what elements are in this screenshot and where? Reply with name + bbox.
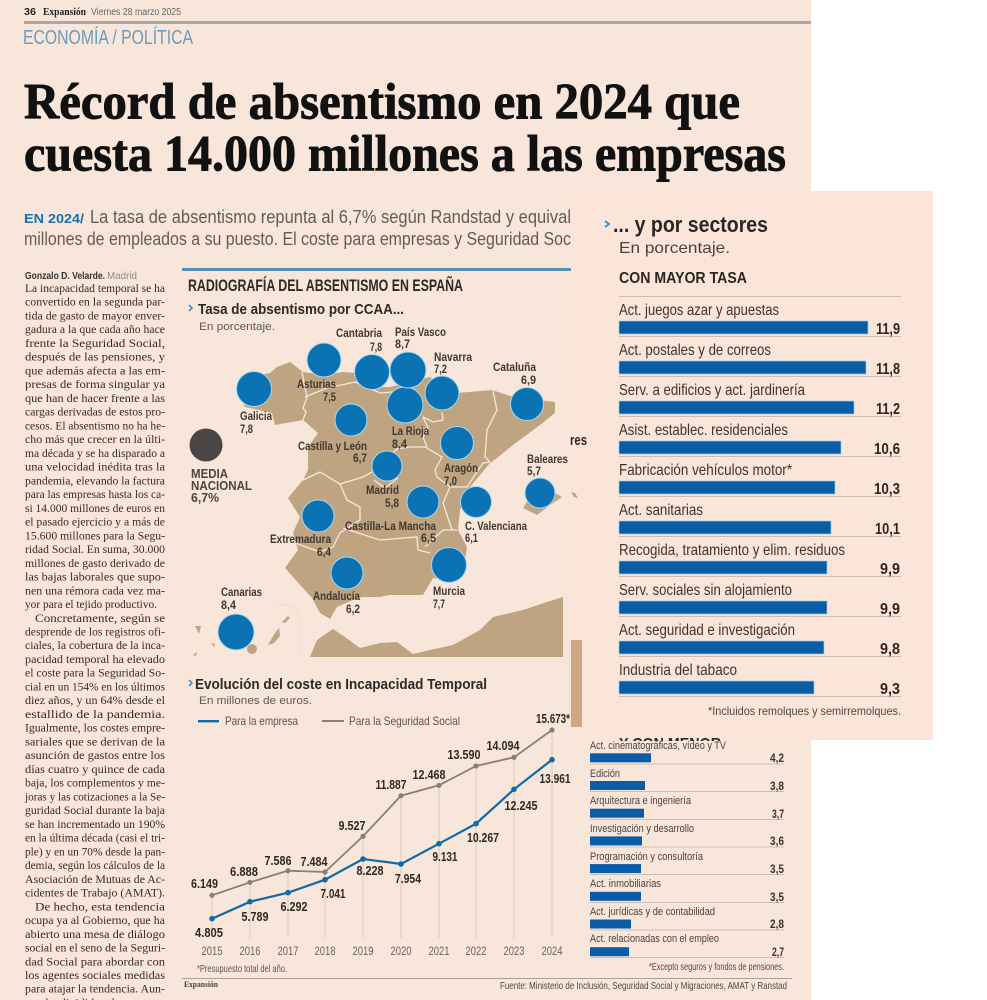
values: Seguridad Social: 6.149: [191, 876, 218, 891]
chart heading: Evolución del coste en Incapacidad Temporal: [195, 676, 487, 693]
map labels: La Rioja: [392, 424, 429, 438]
article body text: millones de gasto derivado de: [25, 556, 165, 570]
article body text: las bajas laborales que supo-: [25, 570, 165, 584]
article body text: frente la Seguridad Social,: [25, 336, 165, 350]
year axis: 2018: [314, 944, 336, 958]
bar chart: lowest rates: 2,8: [770, 917, 784, 931]
bar chart: lowest rates: Act. jurídicas y de contabilidad: [590, 906, 715, 918]
article body text: días cuatro y quince de cada: [25, 762, 166, 776]
lower chart backing: [572, 741, 811, 977]
page header: Viernes 28 marzo 2025: [91, 7, 181, 18]
values: Seguridad Social: 12.468: [412, 767, 446, 782]
map labels: 7,8: [240, 422, 253, 436]
article body text: Concretamente, según se: [35, 611, 165, 625]
title: cuesta 14.000 millones a las empresas: [24, 126, 786, 182]
infographic heading: RADIOGRAFÍA DEL ABSENTISMO EN ESPAÑA: [188, 275, 463, 295]
map heading: En porcentaje.: [199, 321, 275, 333]
article body text: diez años, y un 64% desde el: [25, 693, 166, 707]
map fragment beside panel: res: [570, 432, 587, 449]
map heading: Tasa de absentismo por CCAA...: [198, 301, 404, 318]
article body text: joras y las cotizaciones a la Se-: [24, 789, 165, 803]
article body text: ridad Social. En suma, 30.000: [25, 542, 165, 556]
values: Seguridad Social: 15.673*: [536, 711, 571, 726]
bar chart: highest rates: Act. juegos azar y apuestas: [619, 302, 779, 319]
map labels: 7,0: [444, 474, 457, 488]
line chart: cost evolution: [191, 711, 571, 958]
map labels: Baleares: [527, 452, 568, 466]
page header: [24, 7, 811, 24]
bar chart: highest rates: 9,3: [880, 681, 900, 698]
values: Seguridad Social: [191, 711, 571, 891]
values: empresa: 4.805: [195, 925, 223, 940]
bar chart: highest rates: Recogida, tratamiento y elim. residuos: [619, 542, 845, 559]
values: Seguridad Social: 11.887: [376, 777, 406, 792]
bar chart: lowest rates: 3,8: [770, 779, 784, 793]
year axis: 2024: [542, 944, 563, 958]
year axis: [202, 944, 563, 958]
article body text: que han de hacer frente a las: [25, 391, 165, 405]
clipped heading behind lower chart: Y CON MENOR: [619, 735, 721, 752]
article body text: cargas derivadas de estos pro-: [25, 405, 165, 419]
map labels: Extremadura: [270, 532, 331, 546]
sectors heading: CON MAYOR TASA: [619, 270, 747, 287]
chart legend: Para la empresa: [225, 714, 298, 728]
Canarias inset frame: [275, 605, 300, 652]
article body text: para las empresas hasta los ca-: [25, 487, 165, 501]
map labels: Navarra: [434, 350, 472, 364]
bar chart: highest rates: 9,8: [880, 641, 900, 658]
values: empresa: 9.131: [432, 849, 458, 864]
article body text: social en el seno de la Seguri-: [25, 940, 165, 954]
map labels: Castilla-La Mancha: [345, 519, 436, 533]
article body text: en la última década (casi el tri-: [25, 831, 165, 845]
values: empresa: 12.245: [504, 798, 538, 813]
map labels: 8,4: [392, 437, 407, 451]
subtitle: millones de empleados a su puesto. El coste para empresas y Seguridad Soc: [24, 228, 571, 249]
year axis: 2016: [240, 944, 261, 958]
chart legend: Para la Seguridad Social: [349, 714, 460, 728]
article body text: los agentes sociales medidas: [25, 968, 165, 982]
article body text: que además afecta a las em-: [25, 363, 165, 377]
subtitle: [24, 206, 571, 249]
map labels: Andalucía: [313, 589, 360, 603]
byline: Gonzalo D. Velarde.: [25, 270, 105, 282]
chart footnote: *Presupuesto total del año.: [197, 964, 287, 975]
subtitle: EN 2024/: [24, 211, 84, 226]
national average marker: MEDIA: [191, 466, 229, 481]
year axis: 2015: [202, 944, 223, 958]
mainland silhouette: [238, 362, 555, 619]
sectors heading: ... y por sectores: [613, 212, 768, 237]
bar chart: highest rates: Asist. establec. residenciales: [619, 422, 788, 439]
page header: 36: [24, 7, 36, 18]
bar chart: highest rates: [619, 302, 901, 698]
article body text: De hecho, esta tendencia: [35, 899, 166, 913]
bar chart: highest rates: 9,9: [880, 601, 900, 618]
map labels: 6,4: [317, 545, 331, 559]
bar chart: lowest rates: Investigación y desarrollo: [590, 823, 694, 835]
bar chart: highest rates: Serv. sociales sin alojamiento: [619, 582, 792, 599]
article body text: desprende de los registros ofi-: [25, 624, 165, 638]
national average marker: NACIONAL: [191, 478, 252, 493]
bar chart: lowest rates: 3,7: [772, 807, 784, 821]
article body text: La incapacidad temporal se ha: [25, 281, 166, 295]
lower chart footnote: *Excepto seguros y fondos de pensiones.: [649, 962, 784, 973]
Baleares: [523, 490, 562, 515]
map labels: 7,5: [323, 390, 336, 404]
values: Seguridad Social: 7.484: [300, 854, 328, 869]
article body text: guridad Social durante la baja: [25, 803, 166, 817]
article body text: tida de gasto de mayor enver-: [25, 308, 165, 322]
bar chart: lowest rates: Programación y consultoría: [590, 851, 704, 863]
map labels: Castilla y León: [298, 439, 367, 453]
article body text: el coste para la Seguridad So-: [25, 666, 165, 680]
series: empresa: [209, 757, 555, 922]
regional borders: [295, 372, 497, 553]
map labels: C. Valenciana: [465, 519, 527, 533]
bar chart: highest rates: Industria del tabaco: [619, 662, 737, 679]
article body text: cidentes de Trabajo (AMAT).: [25, 886, 165, 900]
article body text: ocupa ya al Gobierno, que ha: [25, 913, 166, 927]
map labels: 7,8: [370, 340, 382, 354]
bar chart: highest rates: 9,9: [880, 561, 900, 578]
map labels: Canarias: [221, 585, 262, 599]
map labels: 5,7: [527, 464, 541, 478]
bar chart: highest rates: 10,3: [874, 481, 900, 498]
article body text: una velocidad inédita tras la: [25, 460, 166, 474]
values: Seguridad Social: 6.888: [230, 864, 258, 879]
byline: Madrid: [107, 270, 137, 282]
bar chart: highest rates: 10,1: [875, 521, 900, 538]
values: Seguridad Social: 7.586: [264, 853, 292, 868]
values: empresa: 7.041: [320, 886, 346, 901]
bar chart: lowest rates: Act. inmobiliarias: [590, 878, 661, 890]
values: Seguridad Social: 13.590: [448, 747, 480, 762]
bar chart: lowest rates: Edición: [590, 768, 620, 780]
title: Récord de absentismo en 2024 que: [24, 74, 740, 130]
article body text: ma década y se ha disparado a: [25, 446, 166, 460]
article body text: pacidad temporal ha elevado: [25, 652, 165, 666]
article body text: dad Social para abordar con: [25, 954, 165, 968]
title: [24, 74, 786, 182]
map labels: Murcia: [433, 584, 465, 598]
map bubbles: [218, 343, 555, 650]
article body text: para atajar la tendencia. Aun-: [25, 982, 165, 996]
subtitle: La tasa de absentismo repunta al 6,7% según Randstad y equival: [90, 206, 571, 227]
map labels: 8,4: [221, 598, 236, 612]
bar chart: highest rates: 11,9: [876, 321, 900, 338]
page header: Expansión: [43, 7, 86, 18]
values: Seguridad Social: 14.094: [486, 738, 520, 753]
map labels: Asturias: [297, 377, 336, 391]
article body text: Igualmente, los costes empre-: [25, 721, 165, 735]
map labels: [221, 325, 568, 616]
year axis: 2022: [466, 944, 487, 958]
values: empresa: 6.292: [280, 899, 308, 914]
article body text: nen una rémora cada vez ma-: [25, 583, 165, 597]
bar chart: lowest rates: Arquitectura e ingeniería: [590, 795, 692, 807]
values: empresa: 10.267: [467, 830, 499, 845]
values: empresa: 8.228: [356, 863, 384, 878]
map labels: Galicia: [240, 409, 272, 423]
bar chart: lowest rates: 3,5: [770, 862, 784, 876]
bar chart: lowest rates: Act. cinematográficas, vídeo y TV: [590, 740, 727, 752]
north Africa: [310, 597, 563, 657]
chart legend: [198, 714, 460, 728]
article body text: cho más que crecer en la últi-: [25, 432, 165, 446]
year axis: 2020: [390, 944, 412, 958]
bar chart: highest rates: 11,8: [876, 361, 900, 378]
year axis: 2019: [352, 944, 374, 958]
bar chart: highest rates: 10,6: [874, 441, 900, 458]
section label: ECONOMÍA / POLÍTICA: [23, 26, 194, 49]
bar chart: highest rates: 11,2: [876, 401, 900, 418]
map labels: 5,8: [385, 496, 399, 510]
article body text: convertido en la segunda par-: [25, 295, 165, 309]
article body text: se han incrementado un 190%: [25, 817, 165, 831]
bar chart: highest rates: Serv. a edificios y act. jardinería: [619, 382, 805, 399]
map labels: País Vasco: [395, 325, 446, 339]
footer: Fuente: Ministerio de Inclusión, Seguridad Social y Migraciones, AMAT y Ranstad: [500, 980, 787, 992]
article body text: demia, según los cálculos de la: [25, 858, 166, 872]
year axis: 2021: [428, 944, 450, 958]
map labels: Aragón: [444, 461, 478, 475]
bar chart: highest rates: Act. postales y de correos: [619, 342, 771, 359]
map labels: 6,2: [346, 602, 360, 616]
map labels: Cantabria: [336, 326, 382, 340]
bar chart: lowest rates: Act. relacionadas con el empleo: [590, 933, 719, 945]
Canarias: [193, 616, 290, 656]
national average marker: 6,7%: [191, 490, 219, 505]
map labels: 6,1: [465, 531, 478, 545]
article body text: si 14.000 millones de euros en: [25, 501, 165, 515]
map labels: Cataluña: [493, 360, 536, 374]
bar chart: lowest rates: 3,5: [770, 890, 784, 904]
map fragment beside panel: [570, 432, 587, 727]
series: Seguridad Social: [209, 727, 555, 898]
bar chart: highest rates: Act. seguridad e investigación: [619, 622, 795, 639]
infographic top rule: [182, 268, 571, 271]
values: empresa: 7.954: [395, 871, 422, 886]
sectors heading: En porcentaje.: [619, 240, 730, 257]
bar chart: lowest rates: 2,7: [772, 945, 784, 959]
values: Seguridad Social: 9.527: [338, 818, 366, 833]
bar chart: lowest rates: 4,2: [770, 751, 784, 765]
bar chart: highest rates: Fabricación vehículos motor*: [619, 462, 792, 479]
values: empresa: 5.789: [242, 909, 268, 924]
map heading: [189, 301, 404, 333]
article body text: asunción de gastos entre los: [25, 748, 165, 762]
article body text: el pasado ejercicio y a más de: [25, 515, 165, 529]
article body text: Asociación de Mutuas de Ac-: [25, 872, 165, 886]
values: empresa: 13.961: [540, 771, 570, 786]
bar chart: highest rates: Act. sanitarias: [619, 502, 703, 519]
article body text: presas de forma singular ya: [25, 377, 166, 391]
map labels: 7,7: [433, 597, 445, 611]
article body text: abierto una mesa de diálogo: [25, 927, 165, 941]
bar chart: lowest rates: 3,6: [770, 834, 784, 848]
year guide lines: [212, 730, 552, 938]
map labels: 7,2: [434, 362, 447, 376]
article body text: cial en un 154% en los últimos: [25, 680, 165, 694]
footer: Expansión: [184, 980, 219, 989]
chart heading: En millones de euros.: [199, 695, 312, 707]
footer: [182, 978, 792, 992]
article body text: [24, 281, 166, 1000]
map labels: 6,5: [421, 531, 436, 545]
map labels: 8,7: [395, 337, 410, 351]
article body text: gadura a la que cada año hace: [25, 322, 165, 336]
sectors heading: [605, 212, 901, 297]
year axis: 2023: [504, 944, 525, 958]
article body text: después de las pensiones, y: [25, 350, 165, 364]
map labels: 6,9: [521, 373, 536, 387]
chart heading: [189, 676, 487, 707]
bar chart: lowest rates: [590, 740, 784, 959]
article body text: sariales que se derivan de la: [25, 734, 166, 748]
values: empresa: [195, 771, 570, 940]
map of Spain: [193, 362, 563, 657]
article body text: estallido de la pandemia.: [25, 707, 165, 721]
article body text: baja, los complementos y me-: [25, 776, 165, 790]
article body text: ple) y en un 70% desde la pan-: [25, 844, 165, 858]
article body text: 15.600 millones para la Segu-: [25, 528, 165, 542]
year axis: 2017: [278, 944, 299, 958]
sectors footnote: *Incluidos remolques y semirremolques.: [708, 704, 901, 718]
article body text: pandemia, elevando la factura: [25, 473, 166, 487]
map labels: Madrid: [366, 483, 399, 497]
map labels: 6,7: [353, 451, 367, 465]
article body text: ciales, la cobertura de la inca-: [25, 638, 165, 652]
national average marker: [190, 428, 252, 505]
panel: sectors overlay: [571, 191, 933, 977]
article body text: cesos. El absentismo no ha he-: [25, 418, 165, 432]
article body text: yor para el tejido productivo.: [25, 597, 157, 611]
